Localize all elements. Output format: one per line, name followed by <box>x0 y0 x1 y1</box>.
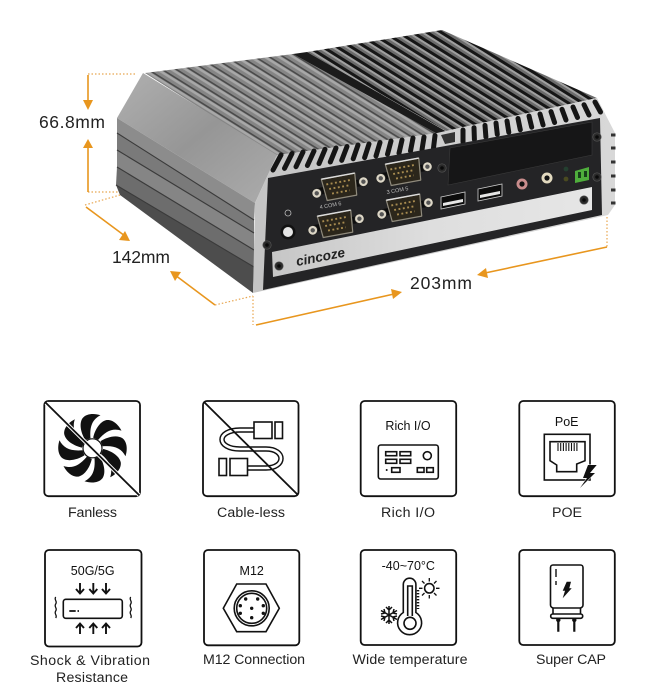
arrow: depth forward <box>86 207 130 241</box>
arrow: width right <box>256 289 402 325</box>
icon: shock arrows and device <box>55 583 131 634</box>
side ribs <box>116 118 255 293</box>
icon title: M12 <box>240 564 264 578</box>
feature: shock and vibration <box>30 550 150 686</box>
arrow: depth back <box>170 271 215 305</box>
icon: M12 connector <box>223 584 279 632</box>
crossing line <box>204 402 298 495</box>
status LEDs <box>564 167 568 181</box>
feature: wide temperature <box>352 550 468 668</box>
feature: PoE <box>519 401 615 521</box>
dimension: width <box>253 217 607 325</box>
icon: sun <box>419 578 440 598</box>
arrow: width left <box>477 247 607 278</box>
icon: cable <box>219 422 282 476</box>
icon title: PoE <box>555 415 579 429</box>
COM ports <box>306 156 435 240</box>
side notches <box>611 135 616 203</box>
front panel <box>263 118 602 290</box>
icon: capacitor <box>550 565 583 632</box>
arrow: height down <box>83 75 93 110</box>
dimension: height <box>39 74 136 192</box>
COM ports: 3 COM 5 <box>386 186 409 196</box>
heatsink top: left section <box>145 54 441 157</box>
crossing line <box>45 402 139 495</box>
feature: M12 connection <box>203 550 305 668</box>
label plate <box>272 187 592 277</box>
label: Wide temperature <box>352 652 468 668</box>
label: Rich I/O <box>381 505 435 521</box>
label: Fanless <box>68 505 117 521</box>
brand name: cincoze <box>295 245 347 269</box>
icon: I/O panel <box>378 445 438 479</box>
front face <box>253 98 615 293</box>
icon title: -40~70°C <box>382 559 435 573</box>
centre channel <box>293 52 456 137</box>
icon: fan <box>58 414 127 483</box>
label: M12 Connection <box>203 652 305 668</box>
icon: network jack <box>544 434 597 488</box>
icon: lightning bolt <box>580 465 597 488</box>
label: Cable-less <box>217 505 285 521</box>
label line two: Resistance <box>56 670 128 686</box>
heatsink top: right section <box>307 30 597 136</box>
feature: cable-less <box>203 401 298 521</box>
icon: snowflake <box>381 606 397 624</box>
label: Shock & Vibration <box>30 653 150 669</box>
device photo <box>116 30 616 293</box>
side bevel <box>117 73 277 203</box>
power button <box>280 210 296 240</box>
power connector <box>575 167 589 183</box>
dimension: depth <box>85 195 253 305</box>
COM ports: 4 COM 6 <box>319 201 342 211</box>
feature: super capacitor <box>519 550 615 668</box>
feature: fanless <box>44 401 140 521</box>
vent slots <box>273 102 600 170</box>
icon: charge bolt <box>563 582 572 598</box>
expansion cover <box>448 122 592 185</box>
icon: thermometer <box>381 578 440 635</box>
label: Super CAP <box>536 652 606 668</box>
label: height: 66.8mm <box>39 112 105 132</box>
icon title: Rich I/O <box>385 419 431 433</box>
feature: rich I/O <box>361 401 456 521</box>
audio jacks <box>516 172 552 190</box>
USB ports <box>441 184 502 209</box>
panel screws <box>263 133 601 270</box>
label: POE <box>552 505 582 521</box>
arrow: height up <box>83 139 93 192</box>
channel end <box>441 132 455 144</box>
label: width: 203mm <box>410 273 472 293</box>
icon title: 50G/5G <box>71 564 115 578</box>
label: depth: 142mm <box>112 247 170 267</box>
